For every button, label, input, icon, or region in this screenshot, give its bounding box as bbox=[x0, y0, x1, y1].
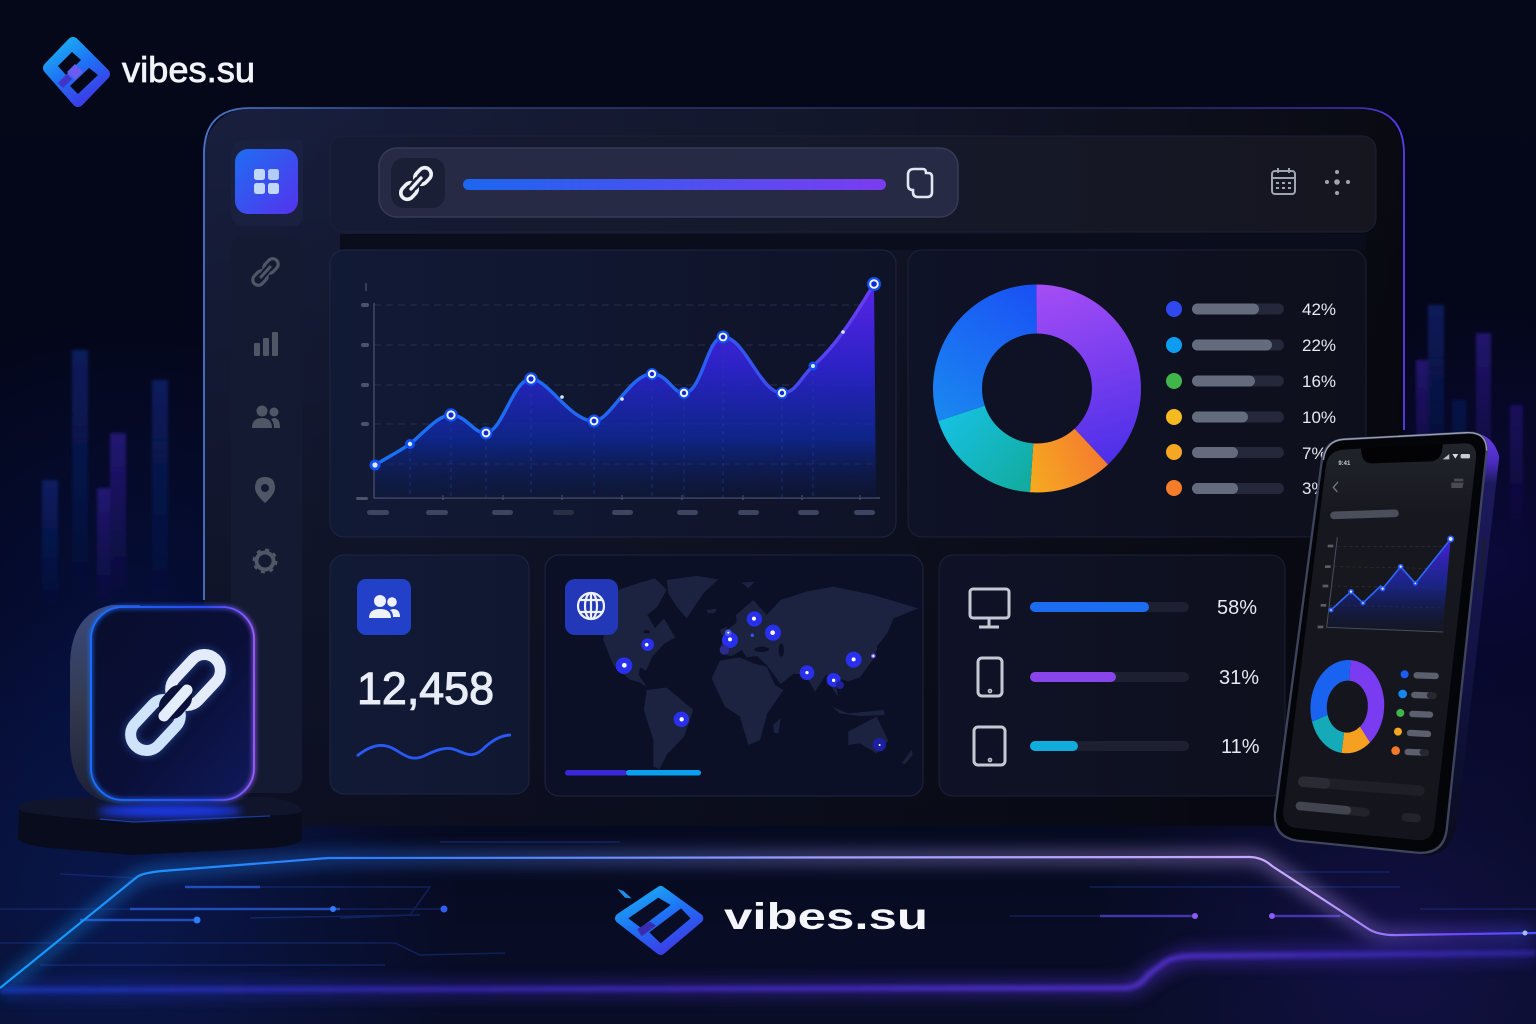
phone donut bbox=[1316, 668, 1378, 745]
circuit board floor bbox=[0, 842, 1536, 990]
map progress bar bbox=[565, 770, 701, 776]
phone side bbox=[1417, 433, 1499, 856]
legend: 7% bbox=[1302, 444, 1327, 463]
icon: phone bbox=[978, 658, 1002, 696]
icon: sidebar link bbox=[251, 256, 280, 288]
chart line bbox=[375, 284, 874, 465]
icon: sidebar pin bbox=[255, 477, 275, 503]
status bar bbox=[1338, 454, 1470, 467]
platform bbox=[18, 797, 302, 855]
phone menu icon bbox=[1453, 480, 1463, 487]
phone body bbox=[1275, 433, 1487, 853]
icon: tablet bbox=[974, 727, 1005, 765]
chart area guides bbox=[410, 343, 813, 498]
icon: white link bbox=[398, 165, 434, 202]
legend: 3% bbox=[1302, 479, 1327, 498]
phone rim highlight bbox=[1323, 433, 1487, 460]
icon: dots bbox=[1325, 170, 1350, 195]
legend: 10% bbox=[1302, 408, 1336, 427]
x axis labels bbox=[367, 510, 875, 515]
status bar: 9:41 bbox=[1338, 461, 1351, 467]
phone bottom bars bbox=[1300, 782, 1419, 818]
device percentages bbox=[1217, 597, 1260, 758]
stat number: 12,458 bbox=[357, 663, 494, 714]
home button tile bbox=[231, 140, 303, 226]
device bars bbox=[1030, 602, 1189, 751]
background bars left bbox=[42, 350, 168, 610]
logo: top left bbox=[49, 43, 255, 101]
icon: sidebar users bbox=[252, 406, 280, 428]
chart area bbox=[375, 284, 876, 498]
map pins bbox=[616, 611, 886, 751]
url bar bbox=[379, 148, 958, 217]
phone button bbox=[1478, 538, 1487, 592]
logo text: vibes.su bbox=[724, 896, 928, 937]
panel: devices bbox=[939, 555, 1285, 796]
legend bbox=[1166, 300, 1336, 498]
panel: world map bbox=[545, 555, 923, 796]
device percentages: 11% bbox=[1221, 736, 1260, 758]
chart grid bbox=[374, 305, 876, 464]
icon: users bbox=[357, 579, 411, 635]
icon: calendar bbox=[1272, 168, 1295, 194]
legend: 16% bbox=[1302, 372, 1336, 391]
icon: monitor bbox=[970, 589, 1009, 627]
sidebar bbox=[231, 236, 302, 793]
back chevron bbox=[1333, 482, 1338, 492]
logo text: vibes.su bbox=[122, 49, 255, 90]
logo mark bbox=[49, 43, 104, 101]
chart axes bbox=[366, 283, 880, 500]
donut bbox=[958, 309, 1116, 468]
icon tile bbox=[70, 605, 254, 803]
header pill bbox=[1334, 513, 1395, 515]
legend: 42% bbox=[1302, 300, 1336, 319]
phone bbox=[1275, 433, 1499, 856]
background bars right bbox=[1416, 305, 1523, 535]
phone screen bbox=[1283, 443, 1476, 840]
link button bbox=[391, 158, 445, 208]
tablet frame bbox=[204, 108, 1404, 826]
icon: chain bbox=[124, 648, 227, 757]
device percentages: 31% bbox=[1219, 667, 1259, 689]
phone chart bbox=[1318, 536, 1453, 632]
floating link icon with platform bbox=[18, 605, 302, 855]
progress bar bbox=[463, 179, 886, 190]
icon: globe bbox=[565, 579, 618, 635]
logo: bottom center bbox=[617, 889, 928, 950]
panel: line chart bbox=[330, 250, 896, 537]
panel: donut chart bbox=[908, 250, 1366, 537]
dark strip under top bar bbox=[340, 234, 1366, 250]
notch bbox=[1361, 444, 1443, 463]
logo mark bbox=[617, 889, 698, 950]
icon: sidebar gear bbox=[254, 550, 276, 572]
icon: sidebar bars bbox=[254, 332, 278, 356]
phone legend bbox=[1391, 670, 1436, 755]
device percentages: 58% bbox=[1217, 597, 1257, 619]
world map bbox=[603, 576, 918, 769]
icon: copy bbox=[908, 169, 932, 197]
top bar panel bbox=[330, 136, 1376, 232]
chart points bbox=[370, 277, 881, 470]
panel: users stat bbox=[330, 555, 529, 794]
sparkline bbox=[357, 735, 511, 758]
legend: 22% bbox=[1302, 336, 1336, 355]
y axis labels bbox=[356, 303, 369, 500]
